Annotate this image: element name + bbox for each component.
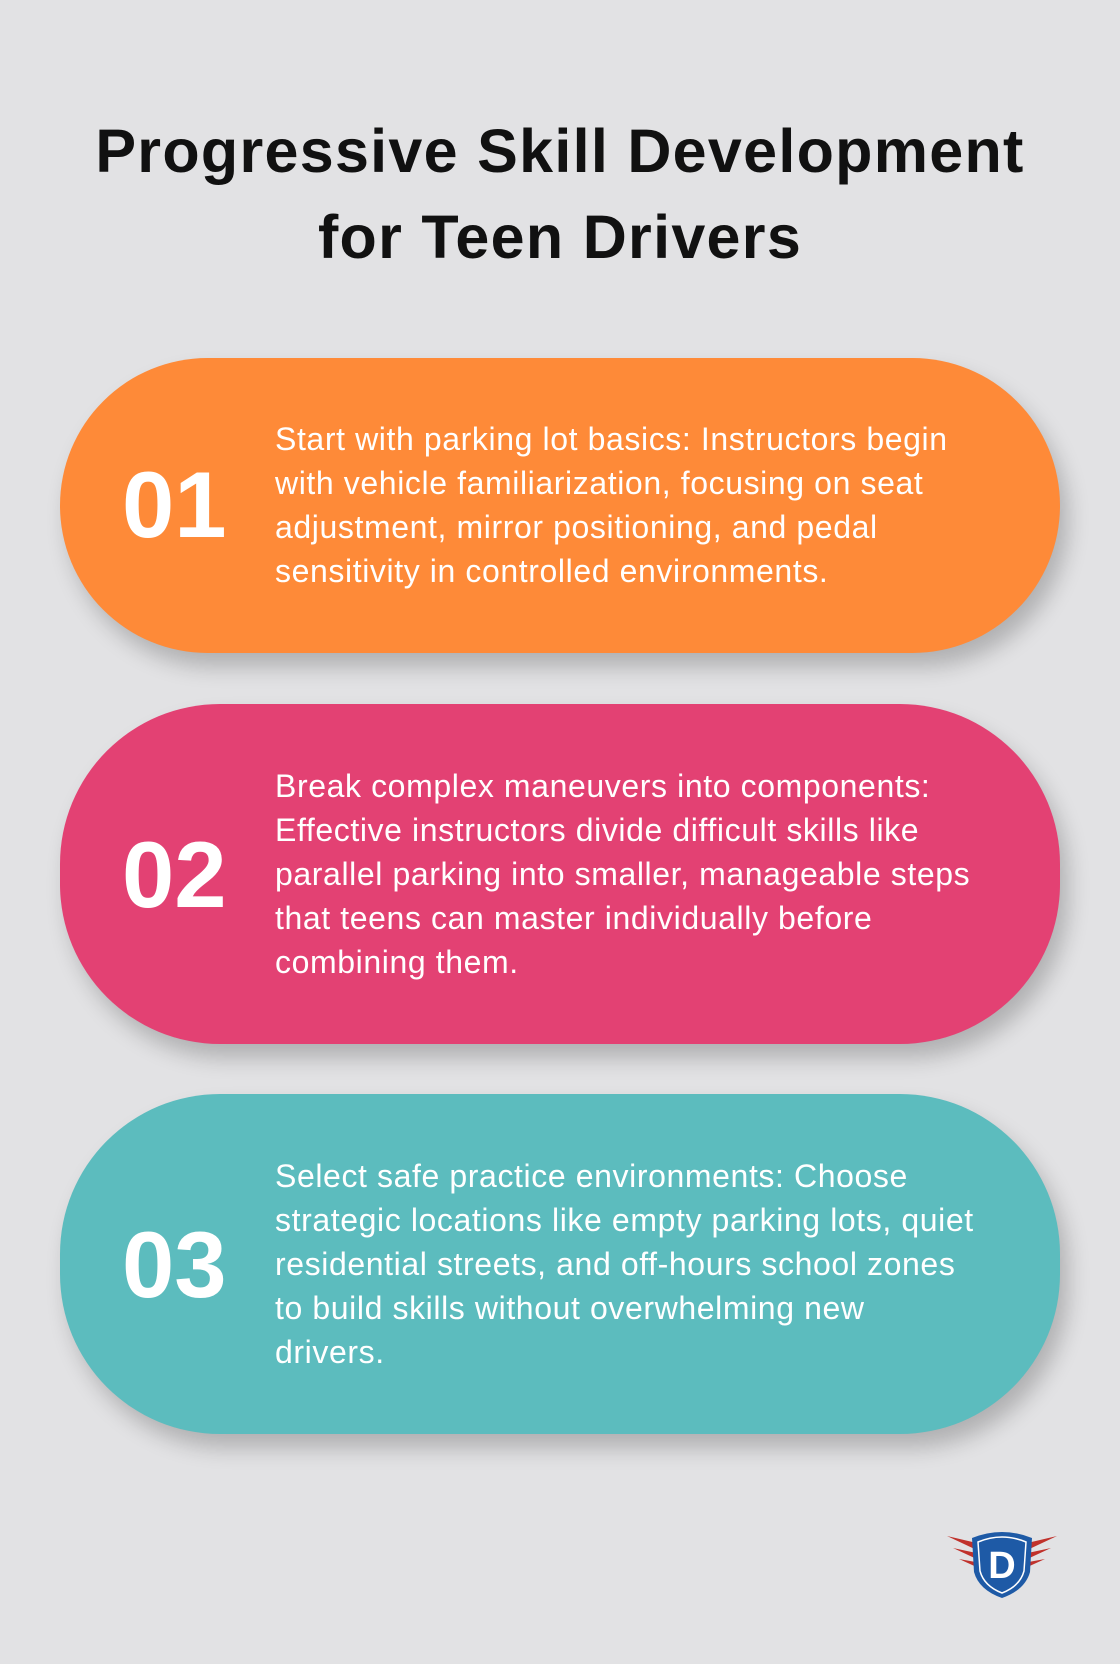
text 02: Effective instructors divide difficult skills like [275,812,919,848]
text 01: sensitivity in controlled environments. [275,553,828,589]
text 03: to build skills without overwhelming new [275,1290,865,1326]
text 01: Start with parking lot basics: Instructors begin [275,421,948,457]
icon: logo shield: D [988,1545,1016,1587]
title: for Teen Drivers [318,203,802,271]
text 02: parallel parking into smaller, manageable steps [275,856,970,892]
text 03: drivers. [275,1334,385,1370]
number 03: 03 [122,1212,227,1317]
text 02: combining them. [275,944,519,980]
text 02: that teens can master individually before [275,900,872,936]
icon: logo shield [947,1532,1057,1598]
text 02 [275,768,970,980]
text 02: Break complex maneuvers into components: [275,768,930,804]
text 01 [275,421,948,589]
text 03: residential streets, and off-hours school zones [275,1246,955,1282]
number 01: 01 [122,452,227,557]
text 01: with vehicle familiarization, focusing on seat [275,465,923,501]
title [95,117,1025,271]
text 03: strategic locations like empty parking lots, quiet [275,1202,974,1238]
text 03 [275,1158,974,1370]
panel: step 03 [60,1094,1060,1434]
panel: step 02 [60,704,1060,1044]
number 02: 02 [122,822,227,927]
panel: step 01 [60,358,1060,653]
text 03: Select safe practice environments: Choose [275,1158,908,1194]
text 01: adjustment, mirror positioning, and pedal [275,509,878,545]
title: Progressive Skill Development [95,117,1025,185]
